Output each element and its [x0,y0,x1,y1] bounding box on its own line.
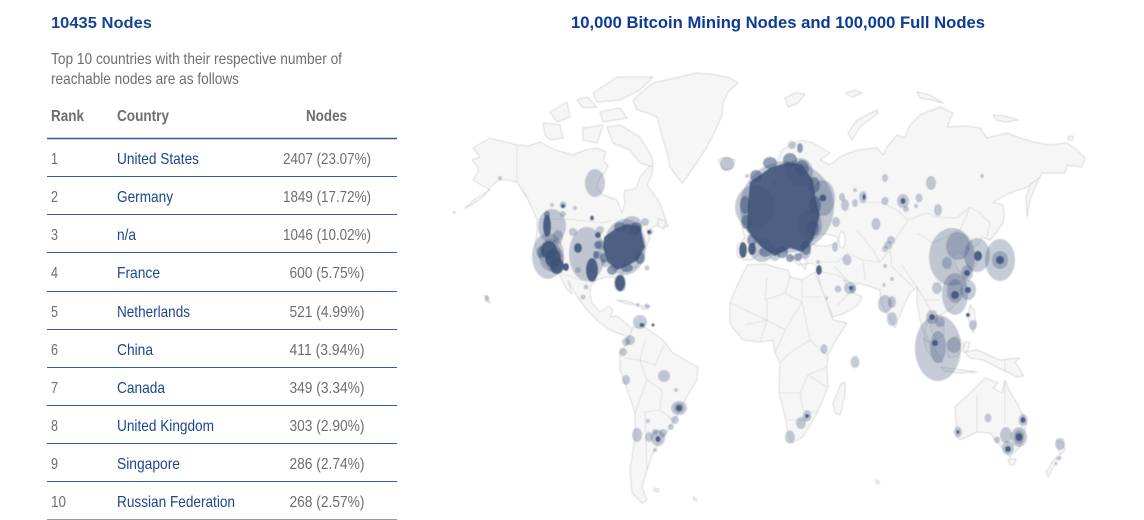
row 5: 5 [51,304,58,321]
row 9: 286 (2.74%) [290,456,364,473]
row 9 [51,456,364,473]
node bubbles: dense dark cores [537,143,1026,452]
bubbles: North America [485,157,749,301]
row 7: Canada [117,380,165,397]
row 8: United Kingdom [117,418,214,435]
row 10: 10 [51,494,66,511]
dense cores: Asia [849,194,1004,346]
world map with node bubbles [453,73,1085,503]
row 1: 1 [51,151,58,168]
row 2 [51,189,371,206]
row 7 [51,380,364,397]
land: South America [620,327,698,503]
row 2: 1849 (17.72%) [283,189,371,206]
row 5 [51,304,364,321]
land: Arctic islands [543,77,1073,229]
row 4: France [117,265,160,282]
intro text [51,51,342,88]
dense cores: US edge clusters [537,211,645,275]
row 10 [51,494,364,511]
dense cores: southern hemisphere [640,323,1026,452]
land: New Zealand [1046,440,1065,477]
dense cores: Europe edge clusters [740,143,821,262]
bubbles: Asia [826,174,1015,381]
row 8: 303 (2.90%) [290,418,364,435]
land: Africa [730,264,847,443]
row 1: United States [117,151,199,168]
row 5: Netherlands [117,304,190,321]
intro text: reachable nodes are as follows [51,71,239,88]
row 9: Singapore [117,456,180,473]
inland water [808,232,845,248]
row 9: 9 [51,456,58,473]
map title: 10,000 Bitcoin Mining Nodes and 100,000 Full Nodes [571,13,985,32]
row 6: 6 [51,342,58,359]
row 1: 2407 (23.07%) [283,151,371,168]
row 6: China [117,342,153,359]
row 8: 8 [51,418,58,435]
land: North and Central America [465,138,668,348]
node bubbles: light halos [485,141,1065,466]
dense cores: North America [541,204,651,291]
table header: Rank [51,108,84,125]
land: Australia [955,378,1027,465]
land: Eurasia [737,107,1085,345]
map: land masses [453,73,1085,503]
row 3: n/a [117,227,136,244]
dense cores: Europe [739,162,826,275]
row 6 [51,342,364,359]
land: Greenland [633,73,738,183]
row 1 [51,151,371,168]
table header [51,108,347,125]
land: Iceland [718,157,735,170]
row 8 [51,418,364,435]
row 2: 2 [51,189,58,206]
table header: Nodes [306,108,347,125]
bubbles: Africa [785,344,860,444]
land: Pacific and Atlantic small islands [453,211,880,501]
row 6: 411 (3.94%) [290,342,364,359]
row 7: 349 (3.34%) [290,380,364,397]
row 3: 1046 (10.02%) [283,227,371,244]
country borders [517,145,1005,470]
bubbles: Europe [735,141,852,266]
row 7: 7 [51,380,58,397]
row 4 [51,265,364,282]
intro text: Top 10 countries with their respective number of [51,51,342,68]
row 2: Germany [117,189,173,206]
land: Caribbean islands [617,300,650,309]
row 5: 521 (4.99%) [290,304,364,321]
land: Madagascar [833,382,845,415]
row 10: Russian Federation [117,494,235,511]
row 10: 268 (2.57%) [290,494,364,511]
row 3 [51,227,371,244]
table header: Country [117,108,169,125]
heading: node count: 10435 Nodes [51,15,152,32]
land: Southeast Asia islands [923,305,1024,377]
row 4: 600 (5.75%) [290,265,364,282]
panel: top 10 countries table [47,108,397,520]
row 4: 4 [51,265,58,282]
bubbles: South America [619,303,687,452]
bubbles: Oceania [954,414,1065,466]
row 3: 3 [51,227,58,244]
